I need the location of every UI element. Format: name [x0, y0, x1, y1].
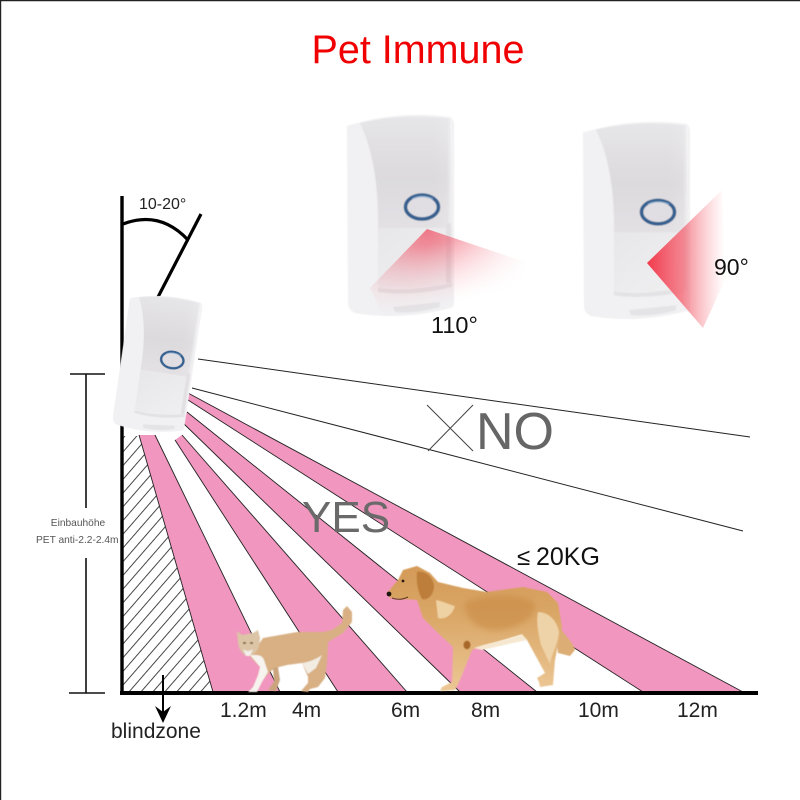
title: Pet Immune: [312, 28, 524, 72]
axes: [120, 196, 124, 694]
distance labels: 10m: [578, 699, 619, 722]
distance labels: 4m: [292, 699, 321, 722]
zone band 3: [183, 412, 537, 692]
mounting angle line and arc: [123, 214, 201, 297]
distance labels: 8m: [471, 699, 500, 722]
zone band 1: [139, 435, 280, 692]
blind zone hatching: [123, 436, 213, 692]
height label: [36, 518, 118, 546]
height label: Einbauhöhe: [51, 518, 106, 529]
height bracket: [69, 374, 105, 693]
label 110 degrees: 110°: [431, 312, 478, 338]
red fan 90 degrees: [647, 190, 725, 328]
height label: PET anti-2.2-2.4m: [36, 535, 118, 546]
red fan 110 degrees: [370, 229, 513, 298]
cat: [237, 606, 352, 692]
dog: [387, 566, 575, 691]
YES label: YES: [302, 493, 390, 542]
NO cross mark: [427, 405, 473, 451]
zone edges: [139, 393, 743, 692]
tilted sensor: [111, 291, 203, 437]
NO label: NO: [476, 403, 554, 461]
undetected beam lines: [192, 359, 750, 531]
weight symbol: ≤: [517, 544, 530, 571]
zone band 4: [188, 393, 743, 692]
zone band 2: [175, 435, 407, 692]
detection zones: [139, 393, 743, 692]
label 90 degrees: 90°: [714, 254, 749, 280]
angle label: 10-20°: [139, 196, 186, 213]
sensor 110 degrees: [347, 115, 454, 316]
distance labels: 12m: [677, 699, 718, 722]
blind zone label: blindzone: [111, 720, 201, 743]
blind zone arrow: [155, 675, 171, 723]
distance labels: 1.2m: [220, 699, 267, 722]
weight value: 20KG: [536, 543, 600, 571]
sensor 90 degrees: [583, 122, 690, 319]
distance labels: [220, 699, 718, 722]
distance labels: 6m: [391, 699, 420, 722]
ground line: [120, 691, 758, 695]
